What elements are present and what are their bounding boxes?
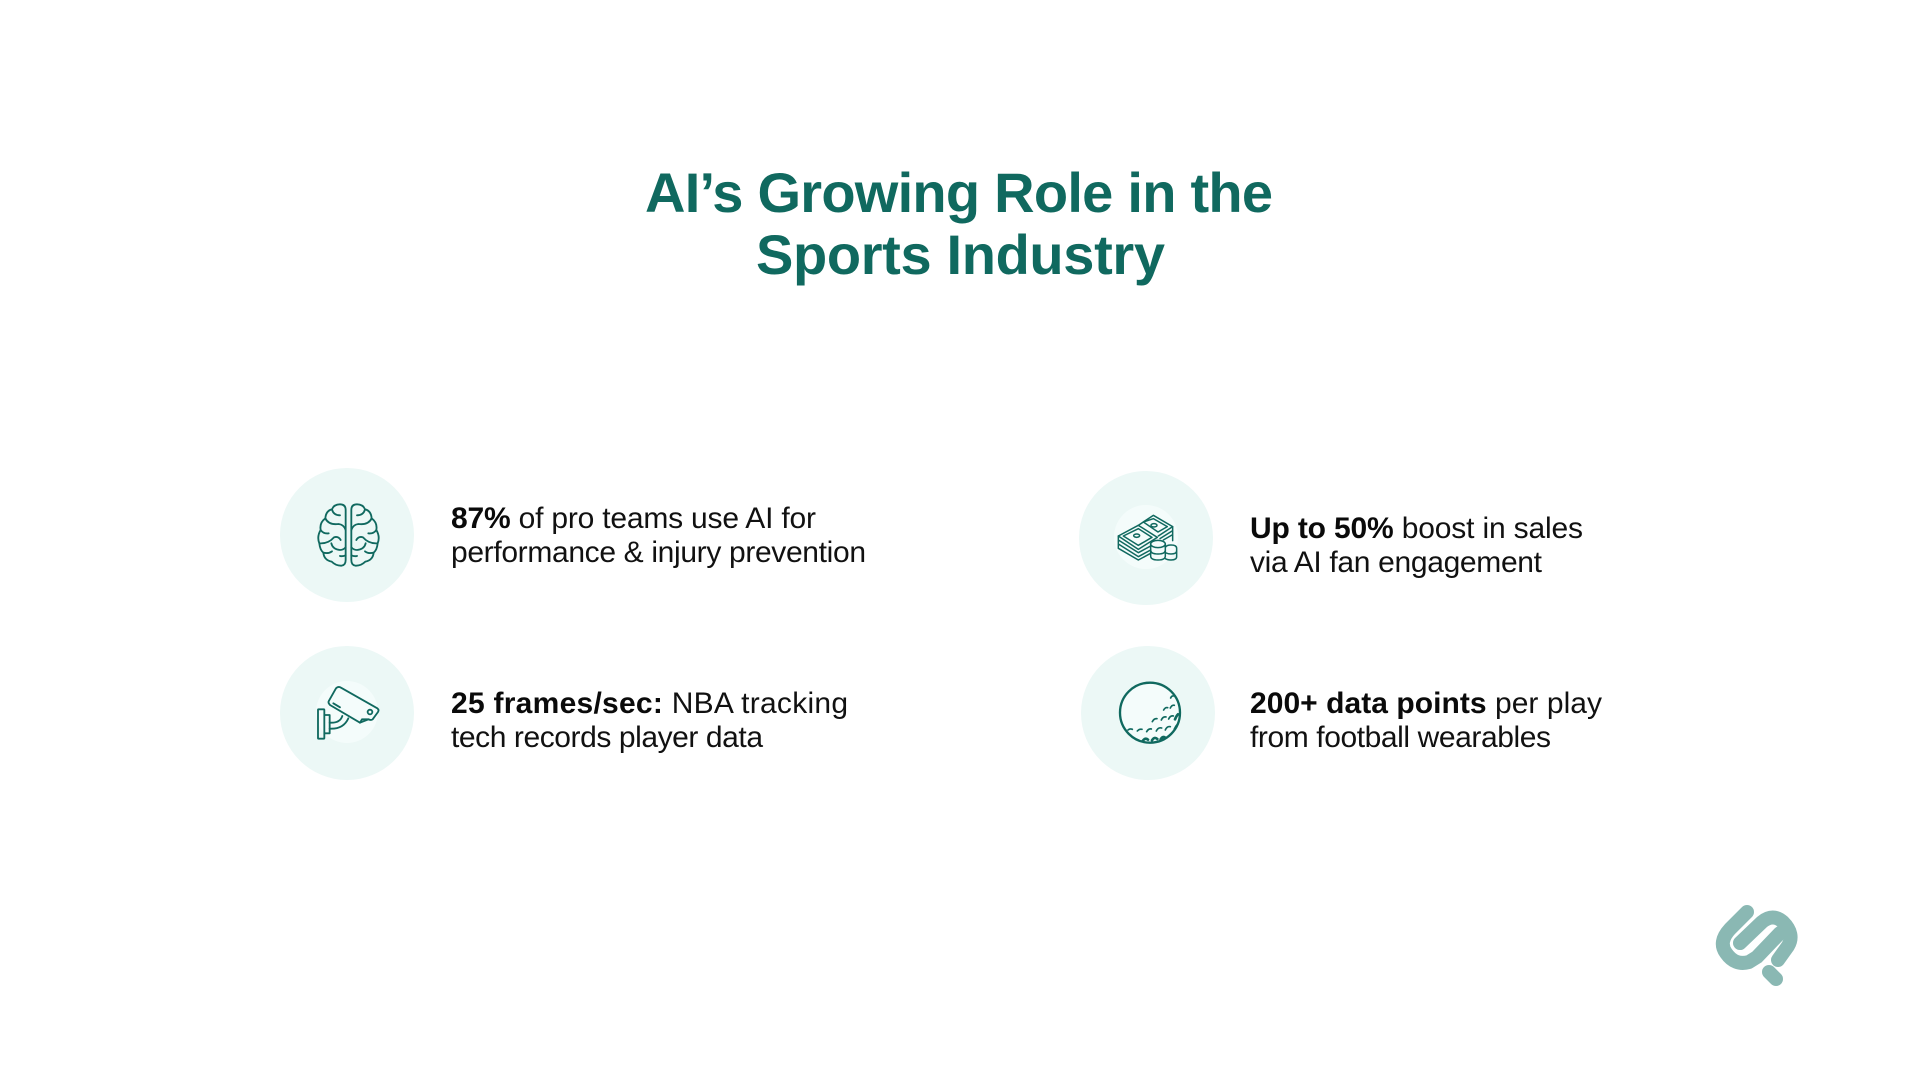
text: 200+ stat: from football wearables <box>1250 721 1551 754</box>
panel: fan engagement stat <box>1079 471 1583 605</box>
icon: logo <box>1723 912 1791 979</box>
text: 25 frames stat: tech records player data <box>451 721 763 754</box>
text: 50% stat: via AI fan engagement <box>1250 546 1543 579</box>
text: 200+ stat <box>1250 687 1602 754</box>
icon: brain <box>280 468 414 602</box>
text: 50% stat: Up to 50% boost in sales <box>1250 512 1583 545</box>
title: Sports Industry <box>756 223 1165 286</box>
title <box>645 161 1273 286</box>
icon: security camera <box>280 646 414 780</box>
text: 50% stat <box>1250 512 1583 579</box>
text: 87% stat: performance & injury prevention <box>451 536 866 569</box>
text: 87% stat: 87% of pro teams use AI for <box>451 502 816 535</box>
panel: pro teams stat <box>280 468 866 602</box>
text: 25 frames stat: 25 frames/sec: NBA tracking <box>451 687 848 720</box>
text: 25 frames stat <box>451 687 848 754</box>
icon: money and coins <box>1079 471 1213 605</box>
panel: wearables stat <box>1081 646 1602 780</box>
text: 87% stat <box>451 502 866 569</box>
panel: tracking stat <box>280 646 848 780</box>
icon: ball <box>1081 646 1215 780</box>
title: AI’s Growing Role in the <box>645 161 1273 224</box>
text: 200+ stat: 200+ data points per play <box>1250 687 1602 720</box>
